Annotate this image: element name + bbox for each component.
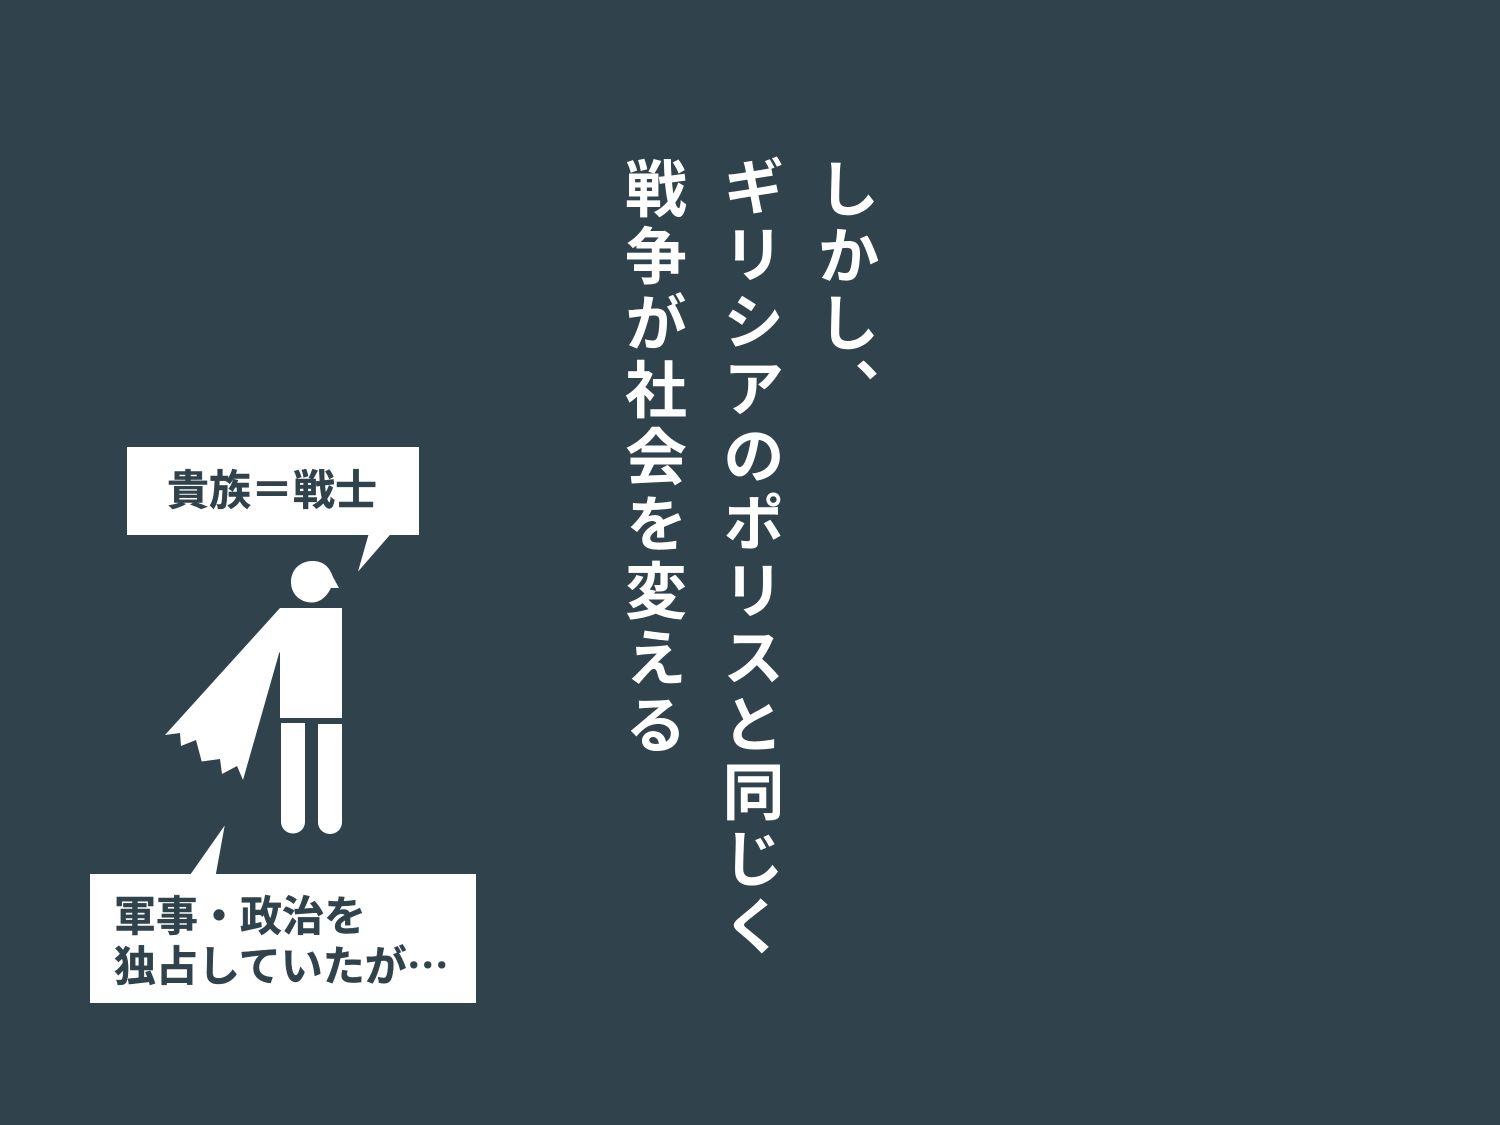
heading column 1: しかし、 (808, 157, 876, 425)
heading column 2: ギリシアのポリスと同じく (712, 155, 782, 961)
speech bubble: bottom (90, 826, 476, 1003)
speech bubble: top (127, 447, 419, 572)
label: nobles are warriors: 貴族＝戦士 (167, 457, 377, 518)
label: monopolised military and politics: 軍事・政治を (114, 883, 366, 944)
icon: caped figure (165, 561, 342, 834)
label: monopolised military and politics: 独占していたが… (114, 933, 449, 994)
heading column 3: 戦争が社会を変える (615, 157, 684, 760)
label: monopolised military and politics (114, 883, 449, 994)
